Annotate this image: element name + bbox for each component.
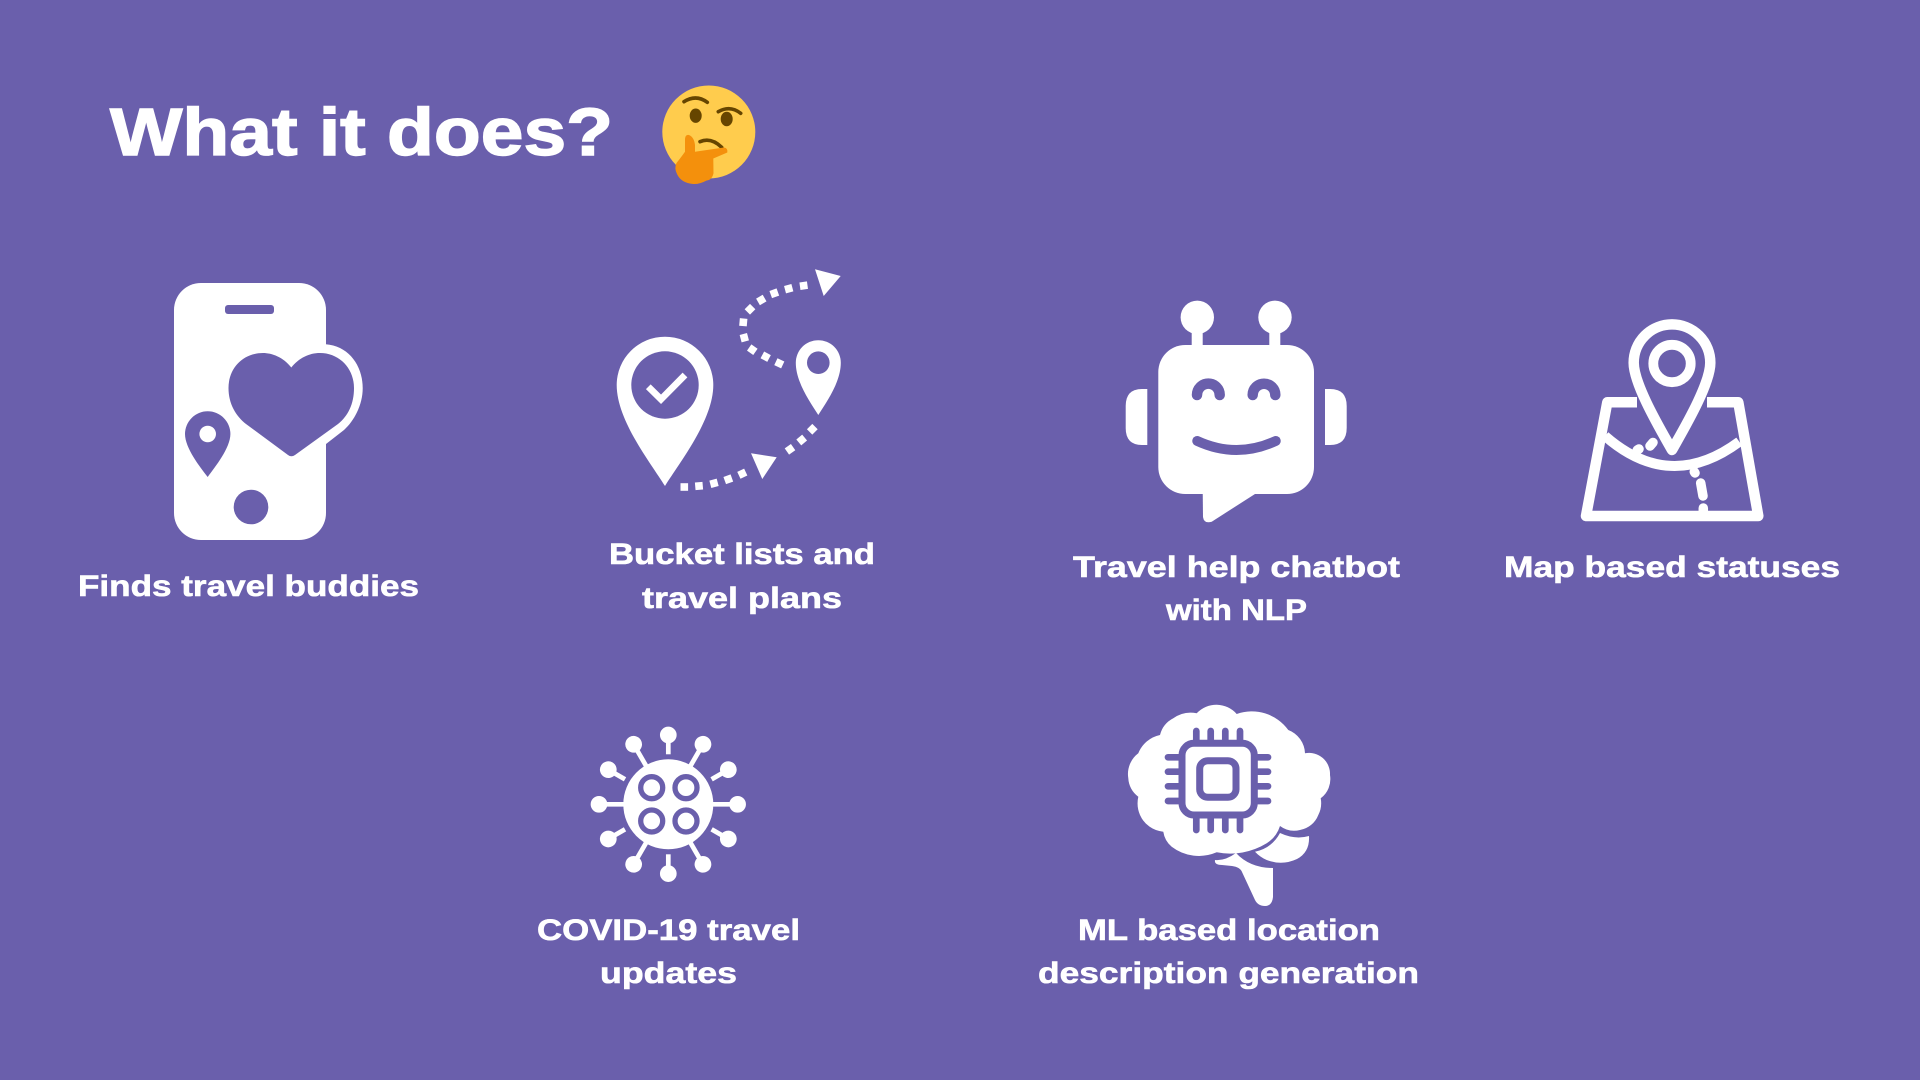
label: COVID-19 travel bbox=[537, 914, 800, 947]
label: Finds travel buddies bbox=[78, 570, 419, 603]
label: Travel help chatbot bbox=[1073, 551, 1400, 584]
panel: ml based location description generation bbox=[1038, 705, 1419, 990]
label: Map based statuses bbox=[1504, 551, 1840, 584]
panel: bucket lists and travel plans: travel plans bbox=[642, 582, 842, 615]
panel: ml based location description generation: description generation bbox=[1038, 957, 1419, 990]
icon: phone with heart and pin bbox=[174, 283, 363, 540]
title: What it does? bbox=[110, 95, 613, 170]
panel: finds travel buddies bbox=[78, 283, 419, 603]
panel: map based statuses bbox=[1504, 324, 1840, 584]
icon: brain with chip bbox=[1128, 705, 1330, 906]
icon: map with location pin bbox=[1586, 324, 1758, 516]
label: ML based location bbox=[1078, 914, 1380, 947]
panel: travel help chatbot: with NLP bbox=[1165, 594, 1307, 627]
icon: thinking face emoji bbox=[662, 86, 755, 184]
icon: route with pins and dotted arrows bbox=[617, 269, 841, 491]
label: Bucket lists and bbox=[609, 538, 875, 571]
panel: covid-19 travel updates bbox=[537, 729, 800, 990]
panel: covid-19 travel updates: updates bbox=[600, 957, 737, 990]
icon: smiling chatbot bbox=[1126, 301, 1347, 522]
panel: bucket lists and travel plans bbox=[609, 269, 875, 615]
icon: virus bbox=[593, 729, 744, 880]
panel: travel help chatbot bbox=[1073, 301, 1400, 627]
